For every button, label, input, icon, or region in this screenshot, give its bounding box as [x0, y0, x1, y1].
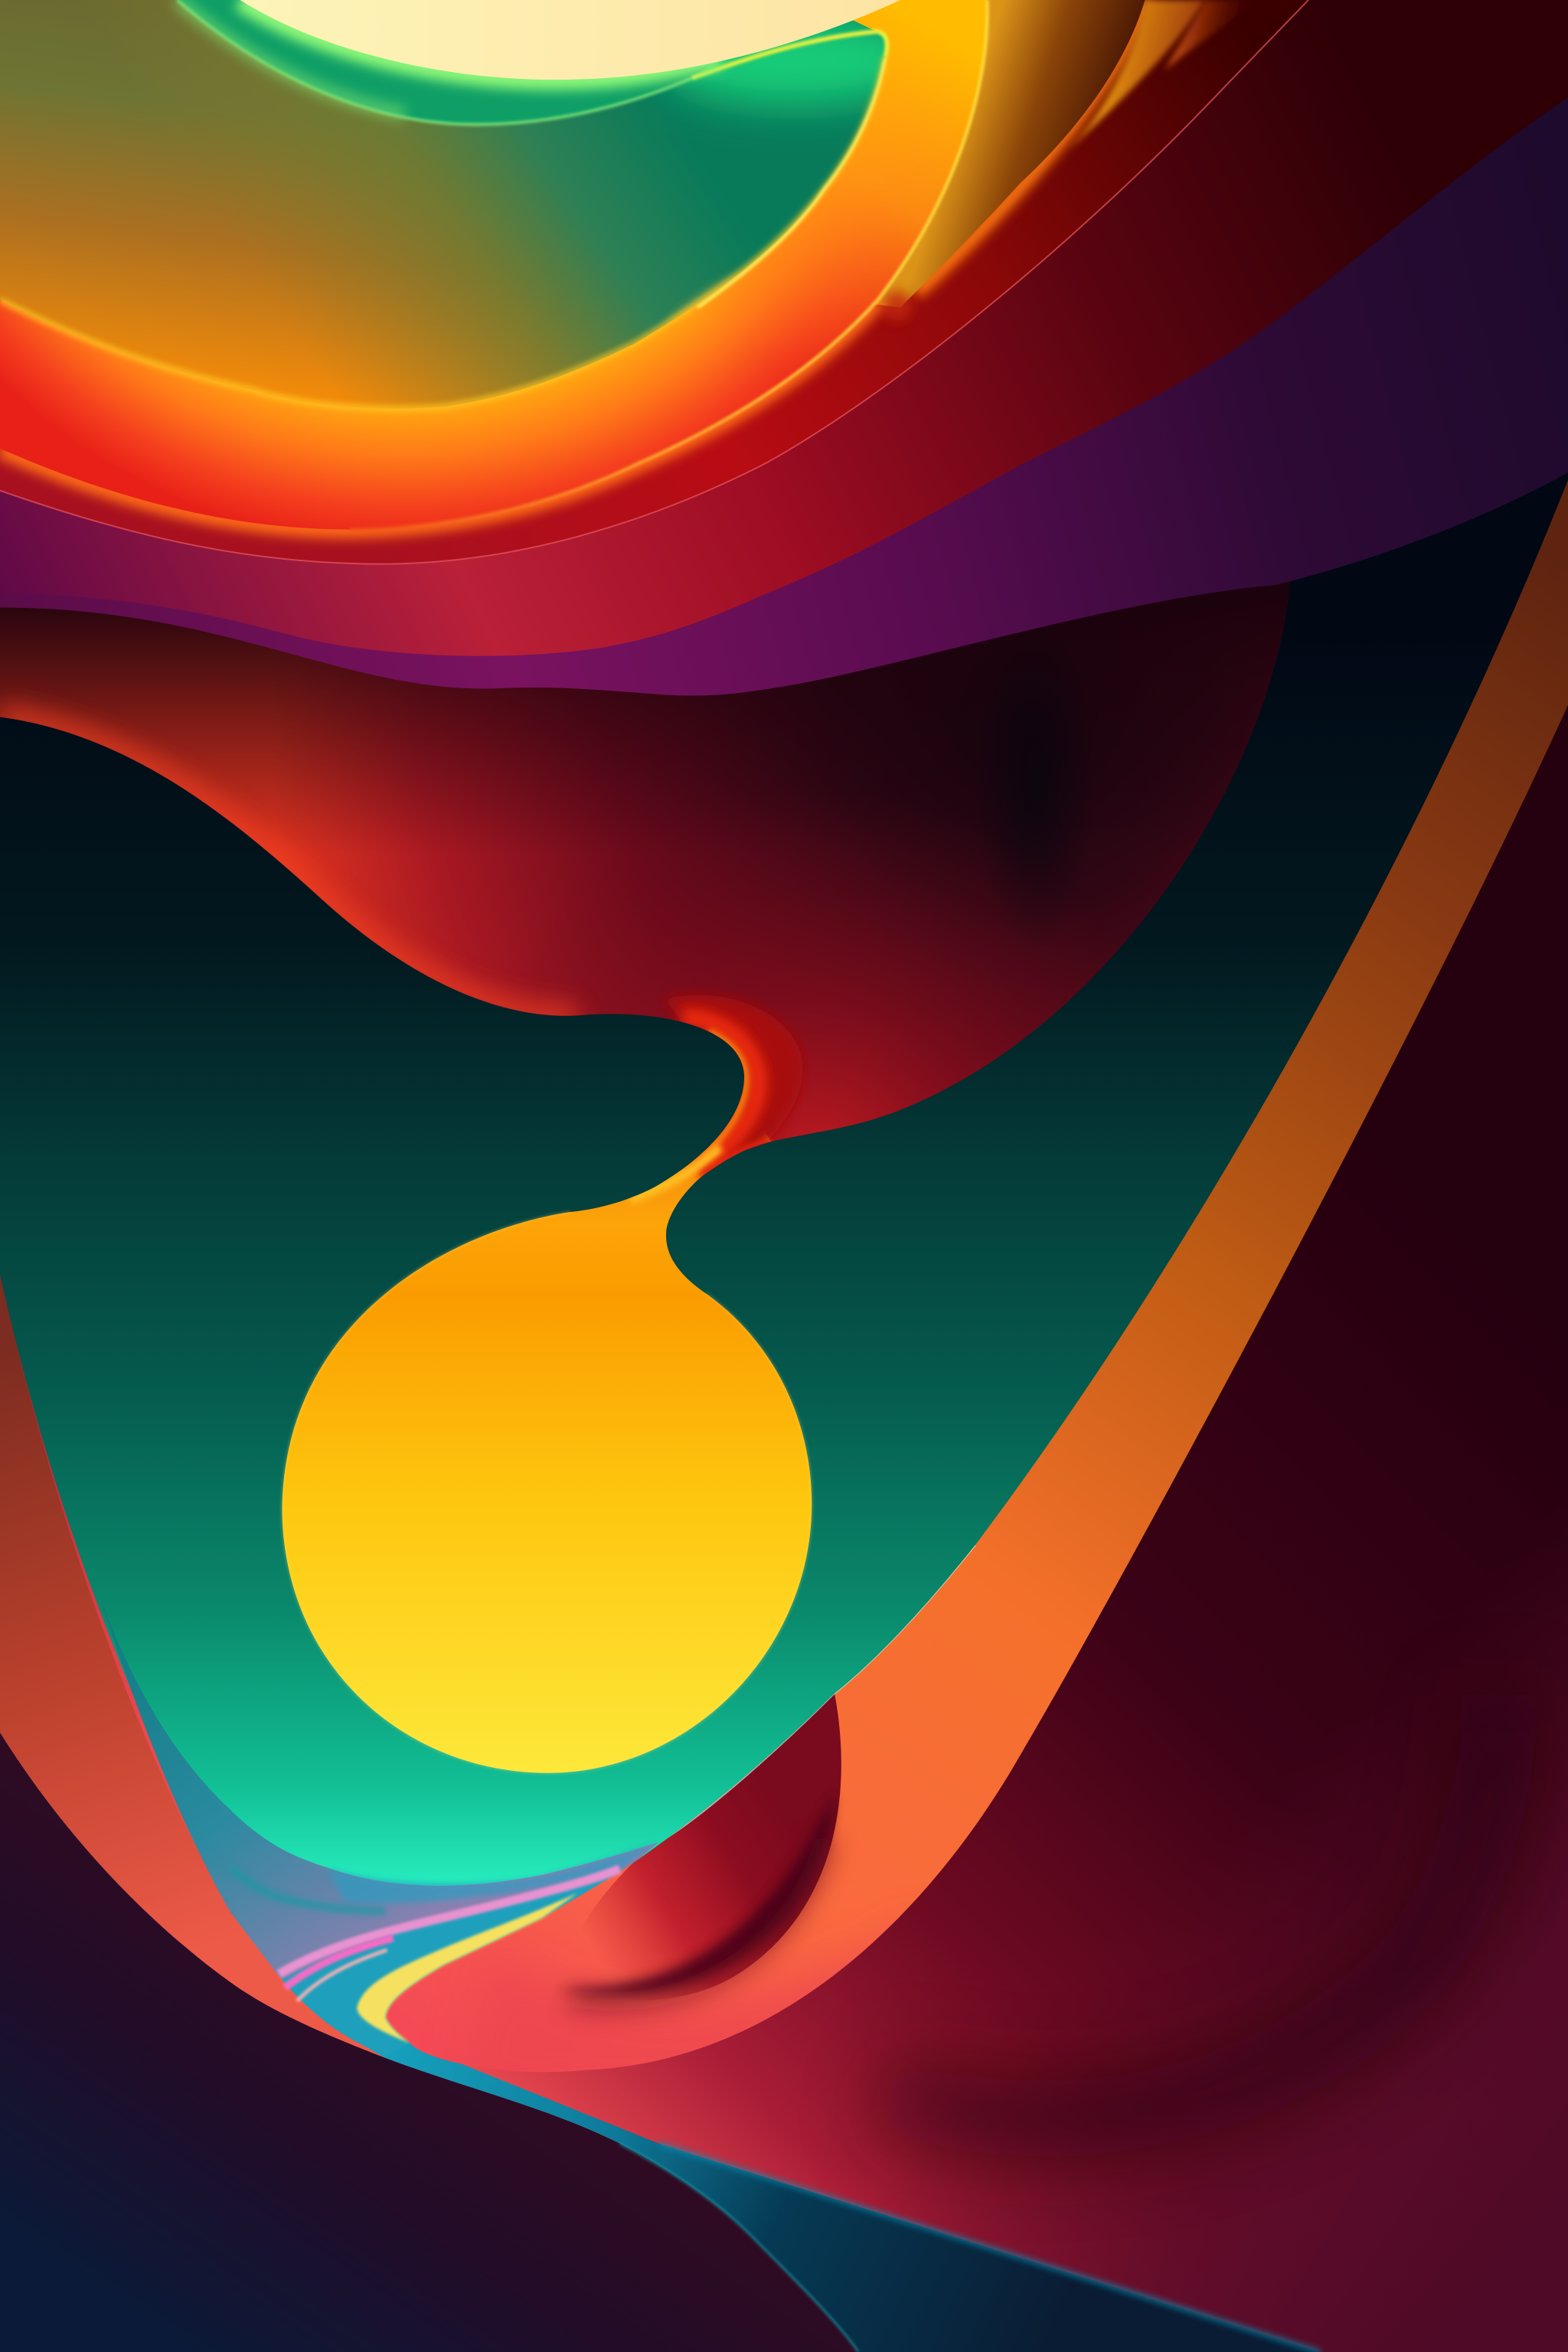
panel: blue-lavender folds at lower left of teal [97, 1590, 658, 1988]
panel: dark red swirling shape [0, 555, 1290, 1176]
panel: orange-red glowing ring [0, 0, 988, 530]
panel: amber top-right streak [840, 0, 1257, 321]
panel: cream light at the top [240, 0, 900, 80]
panel: outer red ring [0, 0, 1308, 564]
panel: dark navy lower left [0, 1733, 858, 2352]
panel: crimson outer layer [0, 0, 1568, 656]
panel: purple band at the top [0, 0, 1568, 696]
panel: bright green crescent [177, 0, 887, 125]
icon: golden sun disc with neck [282, 995, 812, 1773]
panel: left orange-red wedge [0, 1275, 386, 2058]
panel: rainbow ribbon streaks [279, 1869, 619, 2055]
panel: teal field [0, 450, 1568, 1992]
panel: blue streak along the bottom [300, 1998, 1321, 2352]
panel: green-to-orange inner bowl [0, 0, 930, 420]
panel: orange diagonal band [386, 480, 1568, 2100]
panel: red pocket fold [558, 1692, 841, 2001]
panel: red swirl above the neck [630, 995, 802, 1200]
background: deep maroon field [0, 706, 1568, 2352]
